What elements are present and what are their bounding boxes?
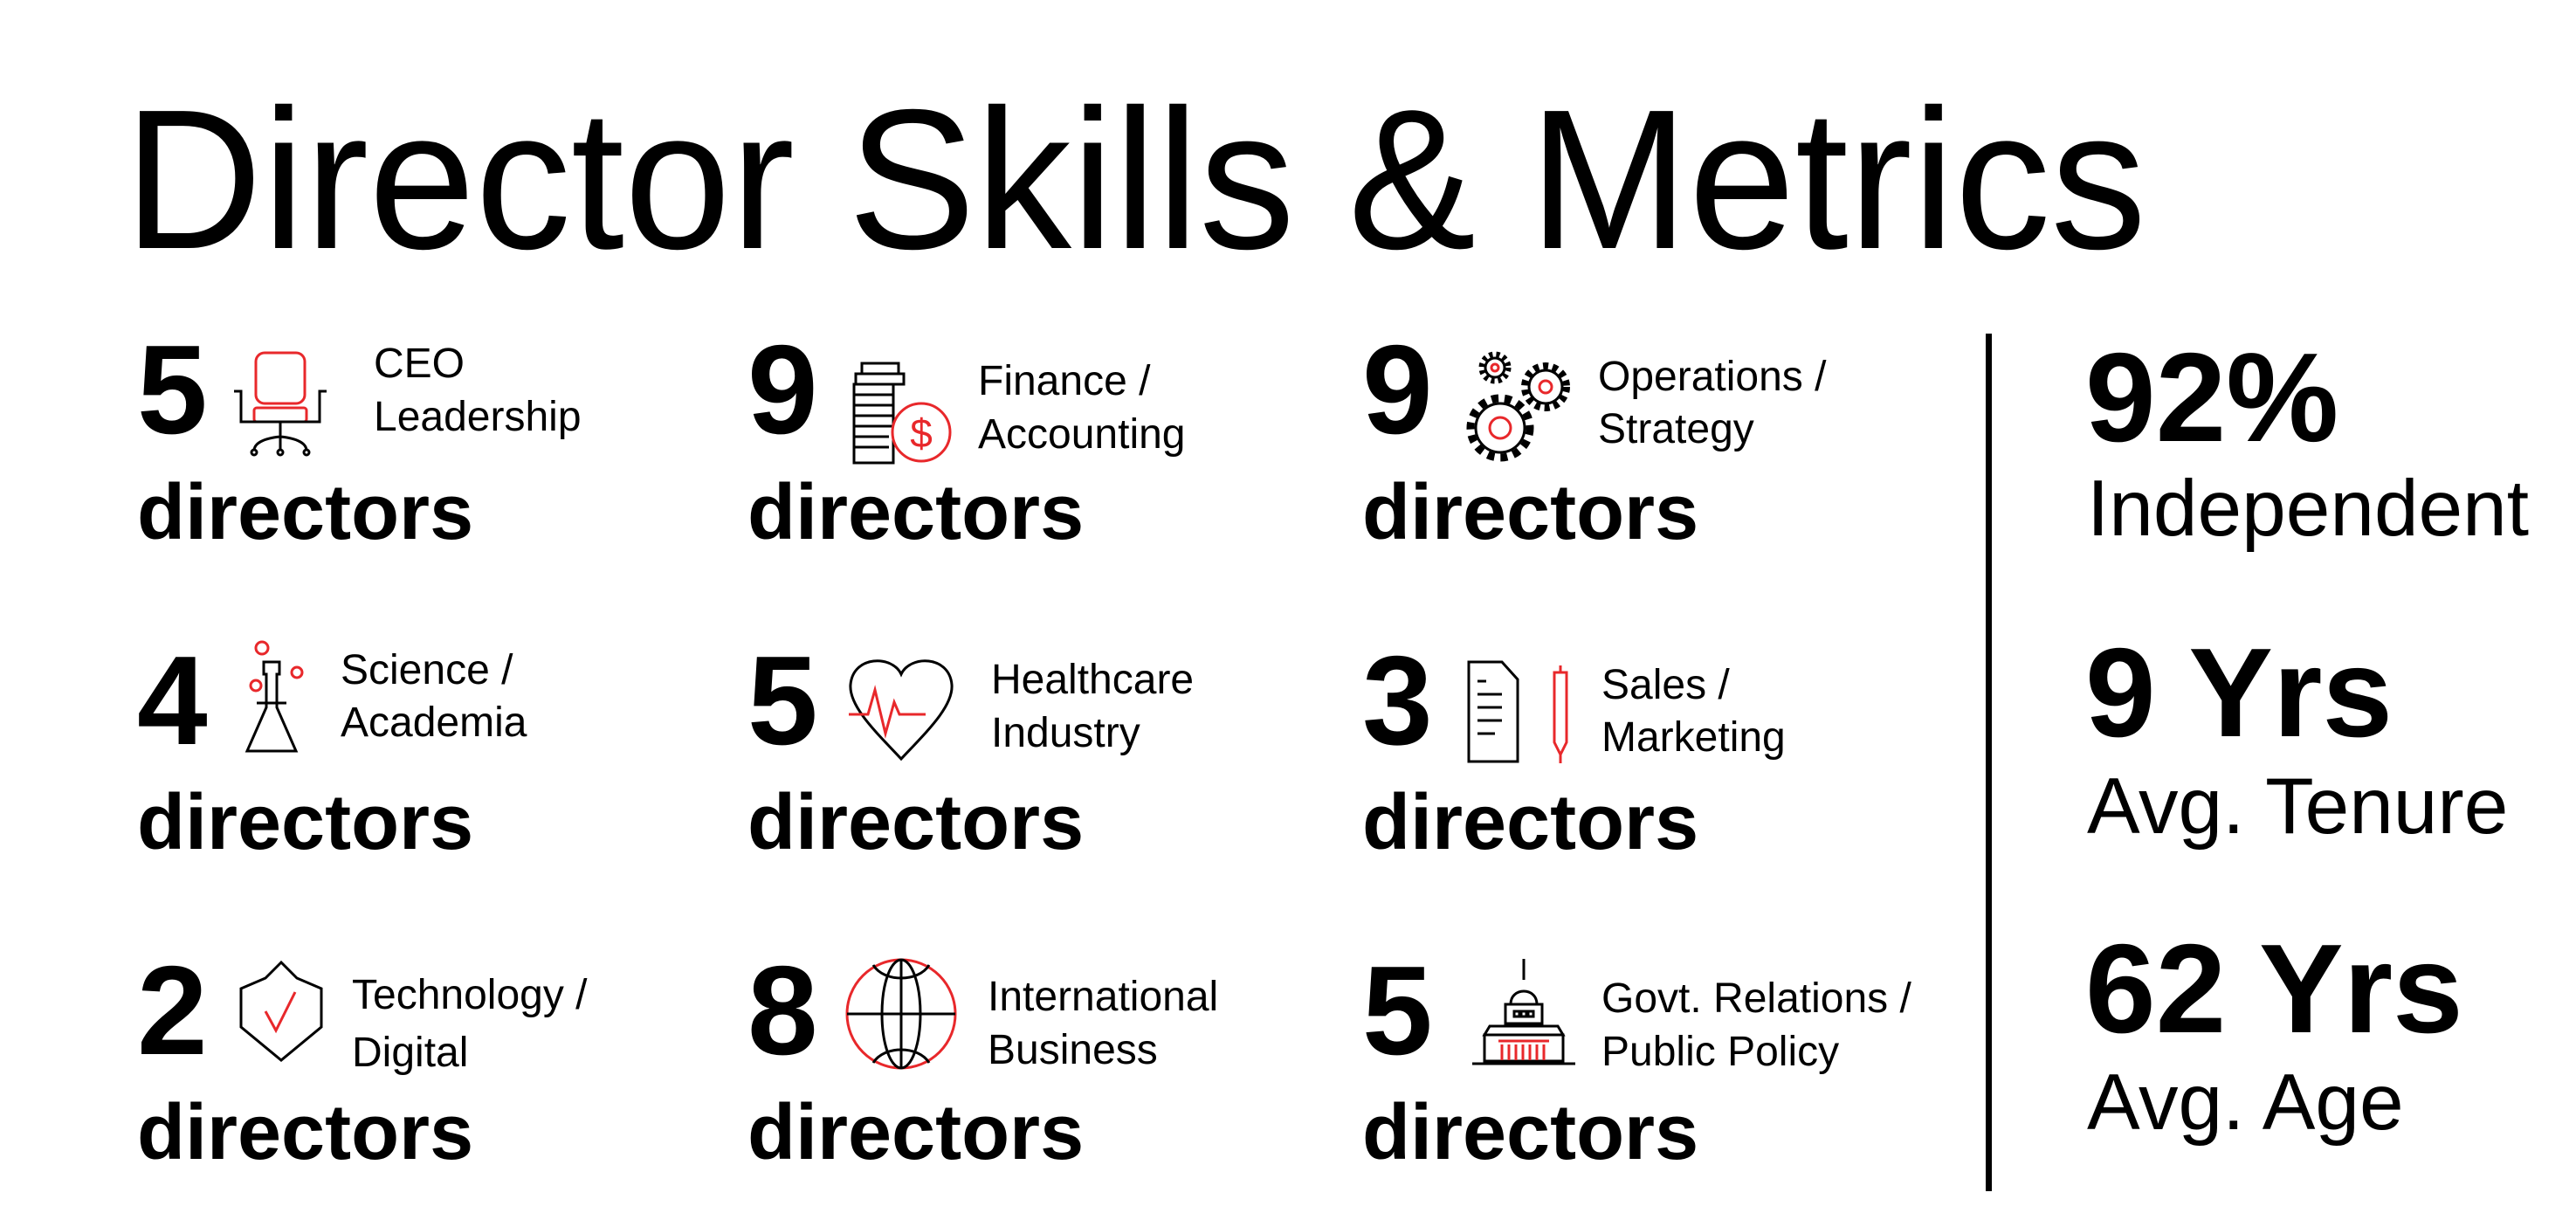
panel: Technology / Digital — [137, 940, 588, 1176]
panel: Govt. Relations / Public Policy — [1362, 940, 1911, 1176]
icon: document and pen — [1469, 662, 1567, 763]
panel: Science / Academia: directors — [137, 779, 473, 866]
label: CEO — [374, 341, 465, 387]
panel: Govt. Relations / Public Policy: directors — [1362, 1089, 1698, 1176]
panel: Operations / Strategy: Strategy — [1598, 406, 1754, 452]
panel: Operations / Strategy: Operations / — [1598, 354, 1827, 400]
panel: Govt. Relations / Public Policy: Public Policy — [1601, 1029, 1839, 1075]
panel: Operations / Strategy: directors — [1362, 469, 1698, 556]
icon: chair — [234, 353, 327, 455]
icon: flask — [247, 642, 302, 751]
title: Director Skills & Metrics — [124, 69, 2146, 291]
panel: Operations / Strategy: 9 — [1362, 319, 1433, 460]
number: 5 — [137, 319, 208, 460]
panel: Healthcare Industry: directors — [747, 779, 1084, 866]
metric: age — [2085, 918, 2463, 1147]
icon: capitol — [1472, 959, 1575, 1064]
metric: age: Avg. Age — [2087, 1058, 2404, 1147]
panel: International Business: directors — [747, 1089, 1084, 1176]
panel: Technology / Digital: directors — [137, 1089, 473, 1176]
panel: CEO Leadership — [137, 319, 582, 556]
metric: independent — [2085, 327, 2529, 553]
panel: Science / Academia: Academia — [341, 700, 527, 746]
metric: independent: Independent — [2087, 465, 2529, 553]
panel: Technology / Digital: Technology / — [352, 972, 588, 1018]
panel: CEO Leadership: Leadership — [374, 394, 582, 440]
metric: tenure — [2085, 622, 2508, 851]
panel: Technology / Digital: 2 — [137, 940, 208, 1081]
panel: Govt. Relations / Public Policy: 5 — [1362, 940, 1433, 1081]
panel: Sales / Marketing: directors — [1362, 779, 1698, 866]
icon: heart — [849, 661, 952, 759]
icon: coins: $ — [910, 410, 933, 456]
panel: Sales / Marketing: Sales / — [1601, 662, 1730, 708]
panel: Sales / Marketing: 3 — [1362, 630, 1433, 771]
panel: International Business — [747, 940, 1218, 1176]
panel: Finance / Accounting: 9 — [747, 319, 818, 460]
metric: age: 62 Yrs — [2085, 918, 2463, 1059]
panel: Science / Academia: 4 — [137, 630, 208, 771]
metric: tenure: 9 Yrs — [2085, 622, 2393, 763]
panel: Technology / Digital: Digital — [352, 1030, 468, 1076]
panel: key metrics — [2085, 327, 2529, 1147]
panel: Finance / Accounting — [747, 319, 1186, 556]
panel: Healthcare Industry — [747, 630, 1194, 866]
panel: Healthcare Industry: Healthcare — [991, 657, 1194, 703]
panel: Science / Academia — [137, 630, 527, 866]
icon: gears — [1471, 355, 1567, 458]
icon: coins — [854, 363, 950, 463]
panel: International Business: Business — [988, 1027, 1158, 1073]
panel: Sales / Marketing — [1362, 630, 1786, 866]
panel: Sales / Marketing: Marketing — [1601, 714, 1786, 761]
panel: Finance / Accounting: Accounting — [978, 411, 1186, 458]
metric: independent: 92% — [2085, 327, 2338, 468]
icon: globe — [847, 960, 955, 1068]
panel: Operations / Strategy — [1362, 319, 1827, 556]
panel: Finance / Accounting: directors — [747, 469, 1084, 556]
panel: Healthcare Industry: Industry — [991, 710, 1140, 756]
icon: shield — [241, 962, 321, 1060]
directors: directors — [137, 469, 473, 556]
panel: Healthcare Industry: 5 — [747, 630, 818, 771]
metric: tenure: Avg. Tenure — [2087, 762, 2508, 851]
panel: International Business: International — [988, 974, 1218, 1020]
divider line — [1986, 334, 1992, 1191]
panel: Govt. Relations / Public Policy: Govt. Relations / — [1601, 975, 1911, 1022]
panel: Science / Academia: Science / — [341, 647, 513, 693]
panel: Finance / Accounting: Finance / — [978, 358, 1151, 404]
panel: International Business: 8 — [747, 940, 818, 1081]
